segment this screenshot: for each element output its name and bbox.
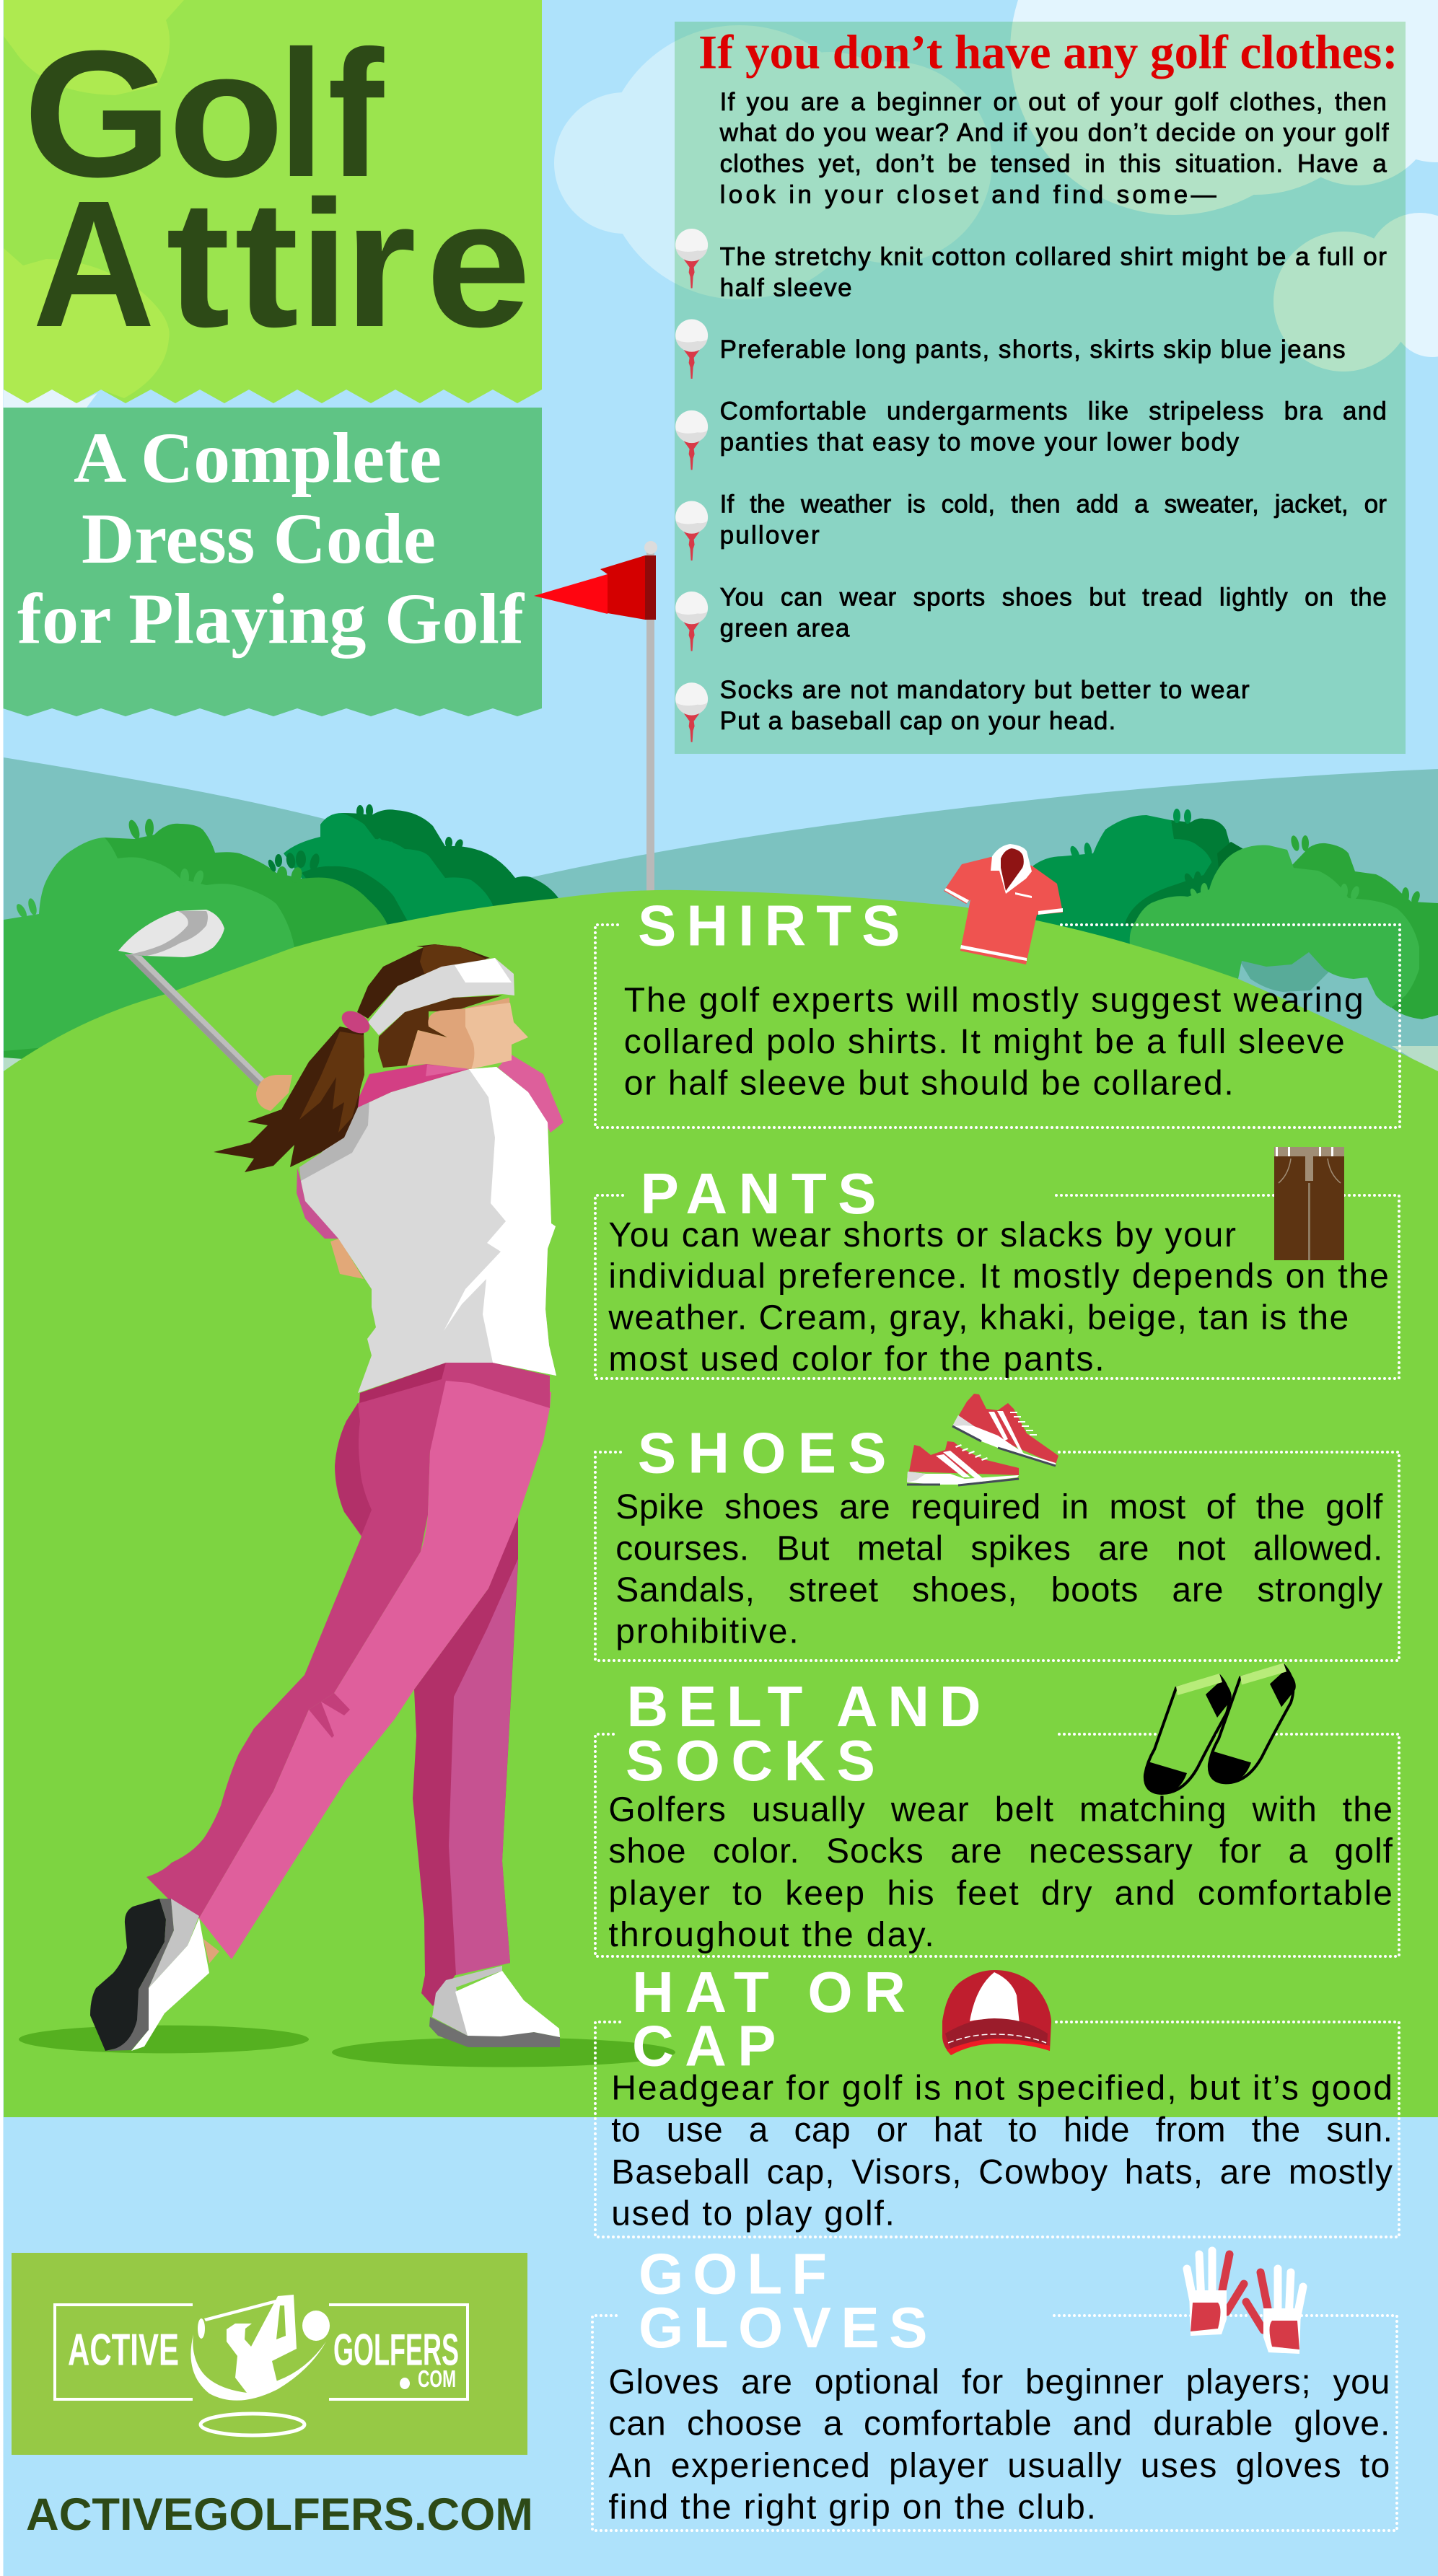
heading: CAP <box>632 2013 776 2078</box>
text block: most used color for the pants. <box>608 1340 1105 1379</box>
hand <box>256 1075 292 1111</box>
text block: intro: what do you wear? And if you don’t decide on your golf <box>719 119 1389 147</box>
collar <box>498 1054 564 1133</box>
heading: Golf Attire: e <box>426 163 531 364</box>
heading: A Complete Dress Code for Playing Golf: for Playing Golf <box>17 579 525 659</box>
text block: Gloves are optional for beginner players; you <box>608 2363 1390 2401</box>
text block <box>624 981 1364 1102</box>
bullet: socks and cap: Socks are not mandatory but better to wear <box>720 676 1250 704</box>
text block <box>615 1488 1383 1650</box>
heading <box>626 1674 981 1793</box>
icon: shoes <box>907 1394 1058 1485</box>
heading: PANTS <box>641 1161 876 1226</box>
text block <box>608 2363 1390 2526</box>
clouds <box>554 0 1438 372</box>
heading: Golf Attire: i <box>299 163 348 364</box>
sleeve <box>297 1168 339 1239</box>
logo: active golfers <box>12 2253 527 2455</box>
panel: shirts <box>595 844 1400 1127</box>
bullet: weather: If the weather is cold, then add a sweater, jacket, or <box>720 491 1387 519</box>
heading: Golf Attire: t <box>234 163 299 364</box>
bullet: weather: pullover <box>720 521 820 549</box>
front shoe <box>90 1899 219 2051</box>
shadows <box>19 2026 675 2067</box>
icon: gloves <box>1187 2251 1303 2354</box>
panel: if you don't have any golf clothes <box>675 22 1406 754</box>
icon: polo shirt <box>944 844 1063 964</box>
lower shoe <box>907 1441 1019 1485</box>
icon: golf tee <box>675 229 708 289</box>
panel: subtitle <box>3 408 542 716</box>
logo: active golfers: GOLFERS <box>333 2326 459 2375</box>
panel: shoes <box>595 1394 1399 1661</box>
ponytail <box>214 1006 374 1172</box>
bullet: shirt: The stretchy knit cotton collared shirt might be a full or <box>720 243 1387 271</box>
heading: Golf Attire: r <box>344 163 416 364</box>
bushes <box>4 804 1438 1072</box>
left bushes <box>4 804 558 1072</box>
text block <box>611 2069 1393 2233</box>
text block: prohibitive. <box>615 1612 799 1650</box>
heading: Golf Attire: o <box>168 13 284 214</box>
text block: individual preference. It mostly depends on the <box>608 1257 1389 1296</box>
panel: hat or cap <box>595 1960 1399 2237</box>
heading: SOCKS <box>626 1728 875 1793</box>
text block: intro: If you are a beginner or out of your golf clothes, then <box>720 88 1387 116</box>
icon: golf tee <box>675 501 708 561</box>
heading: Golf Attire: f <box>328 13 385 214</box>
head <box>357 944 528 1069</box>
icon: socks <box>1145 1663 1296 1793</box>
text block <box>608 1790 1393 1954</box>
right bushes <box>1033 809 1438 1019</box>
heading: Golf Attire: t <box>166 163 230 364</box>
text block: player to keep his feet dry and comfortable <box>608 1874 1393 1912</box>
text block: weather. Cream, gray, khaki, beige, tan is the <box>608 1299 1349 1337</box>
text block: Spike shoes are required in most of the golf <box>615 1488 1383 1526</box>
bullet: shirt: half sleeve <box>720 273 852 302</box>
text block: courses. But metal spikes are not allowed. <box>615 1529 1382 1568</box>
bullet: undergarments <box>675 397 1387 470</box>
heading: A Complete Dress Code for Playing Golf: Dress Code <box>82 498 436 579</box>
cloud in gap <box>4 390 97 408</box>
back leg <box>413 1515 518 2006</box>
heading: BELT AND <box>626 1674 981 1738</box>
heading: A Complete Dress Code for Playing Golf: A Complete <box>74 418 442 498</box>
text block: find the right grip on the club. <box>608 2489 1096 2526</box>
heading: Golf Attire: A <box>32 163 155 364</box>
heading: Golf Attire <box>23 13 531 364</box>
text block: Sandals, street shoes, boots are strongly <box>615 1571 1382 1609</box>
text block: You can wear shorts or slacks by your <box>608 1216 1236 1254</box>
icon: golf tee <box>675 682 708 742</box>
text block: shoe color. Socks are necessary for a golf <box>608 1832 1393 1871</box>
bullet: socks and cap <box>675 676 1250 742</box>
text block: Golfers usually wear belt matching with the <box>608 1790 1393 1829</box>
heading: HAT OR <box>632 1960 906 2024</box>
heading: GOLF <box>639 2242 827 2305</box>
panel: belt and socks <box>595 1663 1399 1956</box>
bullet: weather <box>675 491 1387 561</box>
footer url: ACTIVEGOLFERS.COM <box>26 2489 533 2540</box>
icon: golf tee <box>675 319 708 379</box>
text block: Baseball cap, Visors, Cowboy hats, are mostly <box>611 2153 1393 2192</box>
text block: An experienced player usually uses gloves to <box>608 2447 1390 2485</box>
icon: golf tee <box>675 410 708 470</box>
heading: SHIRTS <box>638 894 900 958</box>
text block: Headgear for golf is not specified, but it’s good <box>611 2069 1393 2107</box>
text block: intro <box>719 88 1389 208</box>
heading: GLOVES <box>639 2295 928 2360</box>
back shoe <box>429 1966 560 2047</box>
bullet: undergarments: panties that easy to move your lower body <box>720 428 1240 456</box>
heading: SHOES <box>638 1421 886 1485</box>
panel: title <box>4 0 542 403</box>
green hill <box>4 890 1438 2117</box>
heading: Golf Attire: l <box>279 13 324 214</box>
heading: Golf Attire: G <box>23 13 172 214</box>
golfer illustration <box>19 910 675 2067</box>
icon: pants <box>1274 1147 1344 1260</box>
bullet: shirt <box>675 229 1387 302</box>
text block: The golf experts will mostly suggest wearing <box>624 981 1364 1020</box>
heading <box>632 1960 906 2078</box>
text block: collared polo shirts. It might be a full sleeve <box>624 1023 1345 1061</box>
bullet: pants: Preferable long pants, shorts, skirts skip blue jeans <box>720 335 1346 364</box>
upper shoe <box>952 1394 1058 1466</box>
bullet: undergarments: Comfortable undergarments like stripeless bra and <box>720 397 1387 426</box>
icon: flag pole <box>644 541 657 896</box>
text block: intro: look in your closet and find some— <box>720 180 1216 208</box>
text block: throughout the day. <box>608 1916 934 1954</box>
icon: red flag <box>534 555 656 620</box>
bullet: socks and cap: Put a baseball cap on your head. <box>720 707 1115 735</box>
text block: to use a cap or hat to hide from the sun. <box>611 2111 1393 2150</box>
text block: can choose a comfortable and durable glove. <box>608 2405 1390 2443</box>
bullet: pants <box>675 319 1346 379</box>
bullet: shoes: green area <box>720 615 850 642</box>
panel: golf gloves <box>592 2242 1397 2531</box>
icon: golf tee <box>675 592 708 651</box>
bullet: shoes <box>675 584 1387 651</box>
panel: pants <box>595 1147 1399 1379</box>
logo: active golfers: ACTIVE <box>68 2326 179 2375</box>
golf club <box>118 910 280 1102</box>
logo: active golfers: COM <box>418 2365 456 2392</box>
heading <box>639 2242 928 2360</box>
text block: or half sleeve but should be collared. <box>624 1064 1234 1102</box>
heading: if you don't have: If you don’t have any golf clothes: <box>698 26 1398 79</box>
bullet: shoes: You can wear sports shoes but tread lightly on the <box>720 584 1387 612</box>
back hills <box>4 757 1438 1082</box>
icon: cap <box>942 1970 1051 2055</box>
text block <box>608 1216 1389 1379</box>
shirt <box>299 1064 556 1393</box>
heading: A Complete Dress Code for Playing Golf <box>17 418 525 659</box>
text block: intro: clothes yet, don’t be tensed in this situation. Have a <box>720 150 1387 177</box>
front leg <box>146 1363 551 1959</box>
text block: used to play golf. <box>611 2195 895 2233</box>
